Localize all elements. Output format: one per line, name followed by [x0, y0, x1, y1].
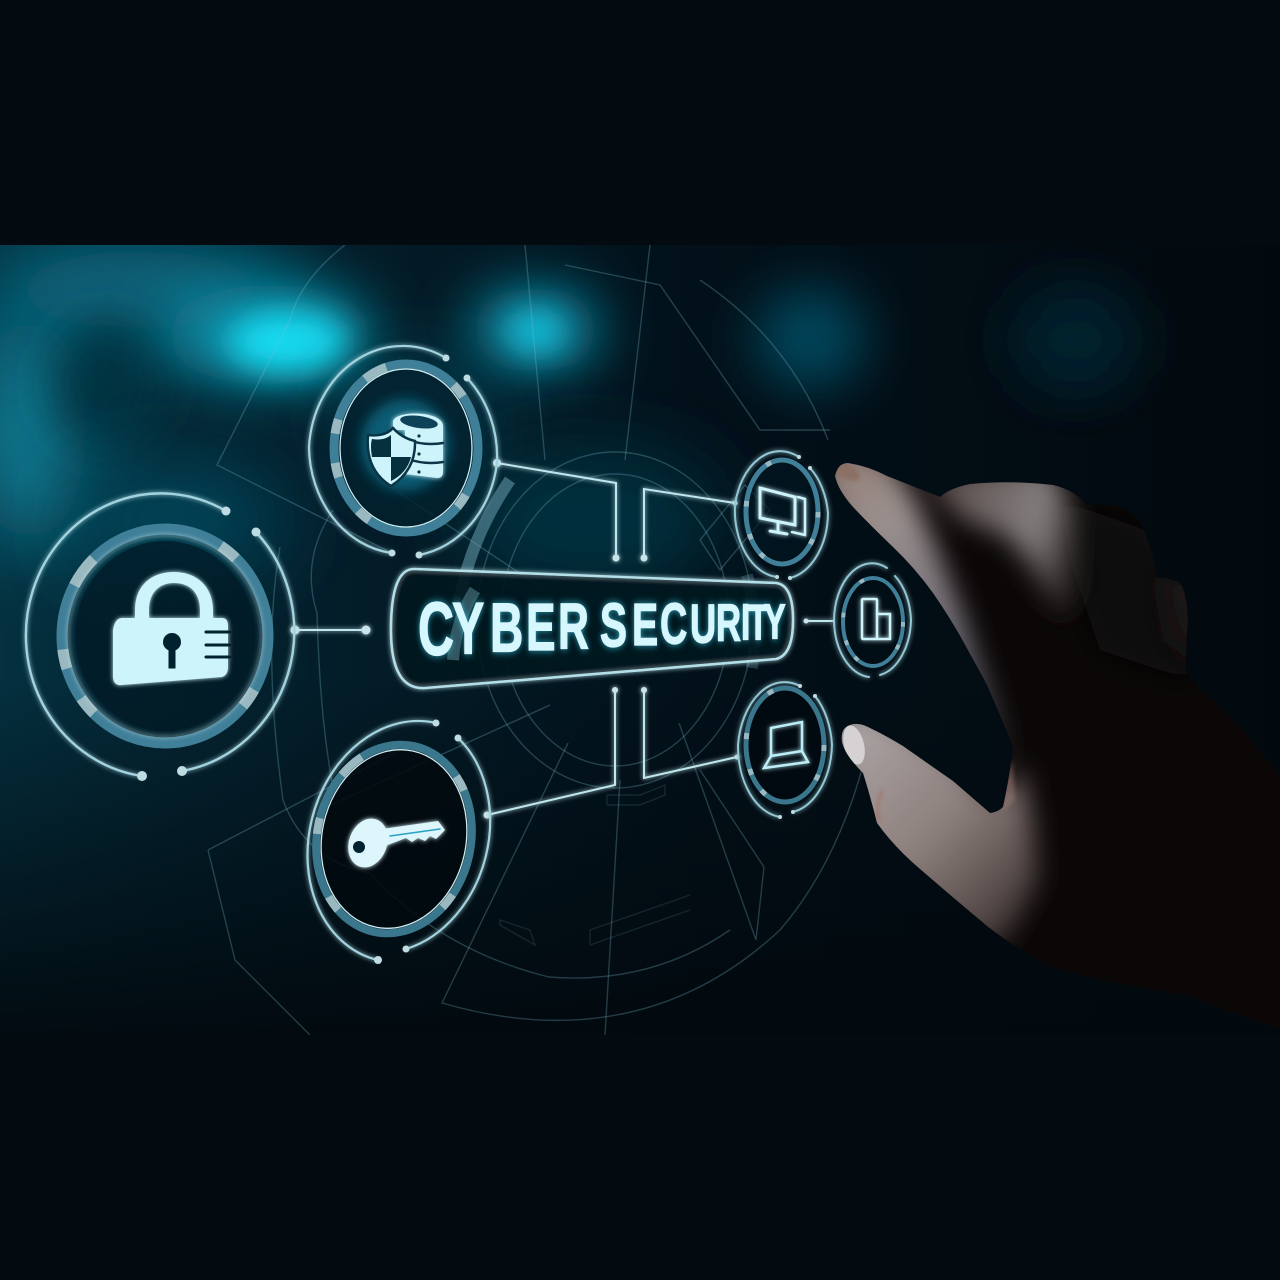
hand silhouette	[860, 484, 1280, 1028]
title: C	[660, 593, 687, 657]
icon: monitor ring	[735, 451, 828, 580]
title: Y	[452, 589, 484, 670]
dim upper back of hand	[1060, 500, 1190, 680]
title: T	[748, 595, 768, 651]
title: R	[716, 595, 741, 653]
title: R	[558, 589, 589, 663]
blurred teal lights	[0, 250, 1140, 590]
hand	[815, 440, 1280, 1040]
index finger light	[835, 463, 1014, 745]
title: U	[690, 593, 716, 654]
bottom fade	[0, 741, 834, 1035]
curved band over title	[453, 590, 475, 660]
title: I	[741, 595, 750, 652]
index fingertip	[836, 463, 860, 482]
thumb web	[1002, 760, 1015, 812]
thumb crease	[878, 790, 883, 822]
right finger edge	[1164, 581, 1188, 644]
HUD background lines	[208, 245, 867, 1035]
icon: padlock	[113, 572, 230, 685]
icon: tablet and phone	[862, 599, 890, 639]
icon: monitor	[760, 488, 805, 535]
translucent curved bands	[453, 480, 754, 668]
title pill	[391, 569, 793, 688]
middle finger light	[925, 465, 1078, 625]
thumb light	[842, 724, 1052, 945]
icon: database	[393, 413, 443, 478]
title: B	[490, 588, 523, 667]
icon: laptop	[764, 722, 808, 768]
icon: padlock ring	[26, 493, 294, 781]
icon: shield	[368, 428, 415, 486]
icon: key	[342, 813, 445, 873]
infographic illustration	[0, 245, 1280, 1035]
title: E	[632, 591, 658, 658]
title: E	[526, 591, 556, 665]
title: Y	[764, 594, 786, 649]
connector lines	[290, 459, 834, 818]
title: S	[600, 592, 627, 661]
thumbnail	[843, 726, 865, 764]
icon: laptop ring	[738, 682, 832, 819]
icon: mobile devices ring	[834, 563, 911, 677]
photo background	[0, 245, 1280, 1040]
icon: key ring	[299, 720, 490, 964]
icon: shield and database ring	[309, 346, 497, 558]
title: C	[418, 587, 454, 672]
